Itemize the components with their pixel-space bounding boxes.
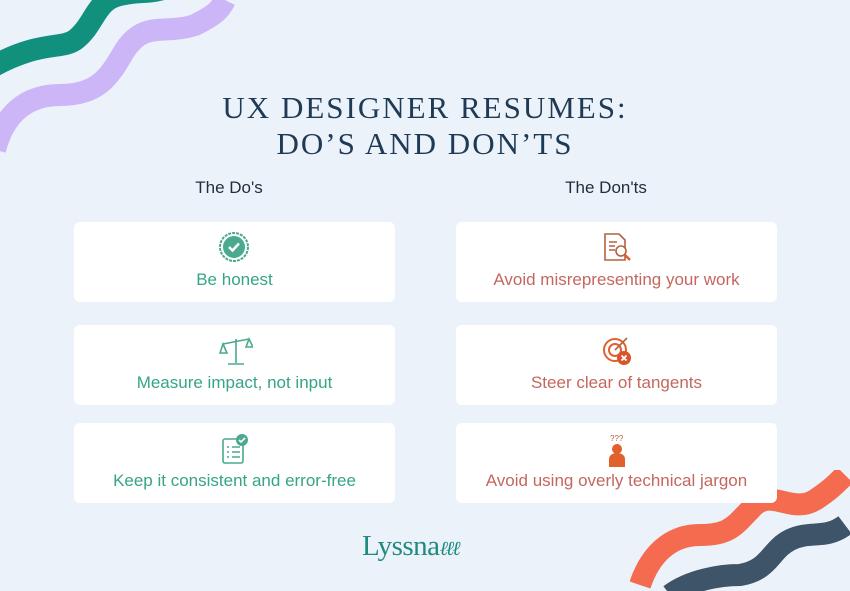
card: misrepresenting: [456, 222, 777, 302]
card: be honest: [74, 222, 395, 302]
icon: document search: [604, 233, 631, 261]
decorative waves bottom-right: [630, 470, 850, 591]
icon: confused person: ???: [610, 434, 624, 443]
icon: target x: [603, 337, 631, 365]
card: measure impact: Measure impact, not input: [137, 373, 332, 392]
decorative waves top-left: [0, 0, 235, 152]
heading: don'ts: The Don'ts: [565, 178, 647, 197]
icon: checklist: [222, 434, 248, 464]
logo: Lyssna: Lyssnaℓℓℓ: [362, 530, 459, 562]
card: tangents: [456, 325, 777, 405]
card: be honest: Be honest: [196, 270, 273, 289]
title: UX DESIGNER RESUMES:: [222, 90, 628, 125]
card: misrepresenting: Avoid misrepresenting your work: [493, 270, 740, 289]
title: DO’S AND DON’TS: [277, 126, 573, 161]
card: consistent: [74, 423, 395, 503]
card: measure impact: [74, 325, 395, 405]
card: jargon: Avoid using overly technical jargon: [486, 471, 747, 490]
icon: confused person: [609, 434, 625, 467]
card: jargon: [456, 423, 777, 503]
icon: badge check: [219, 232, 249, 262]
card: tangents: Steer clear of tangents: [531, 373, 702, 392]
heading: do's: The Do's: [195, 178, 263, 197]
title: [222, 90, 628, 161]
card: consistent: Keep it consistent and error-free: [113, 471, 356, 490]
icon: scale: [219, 337, 253, 365]
